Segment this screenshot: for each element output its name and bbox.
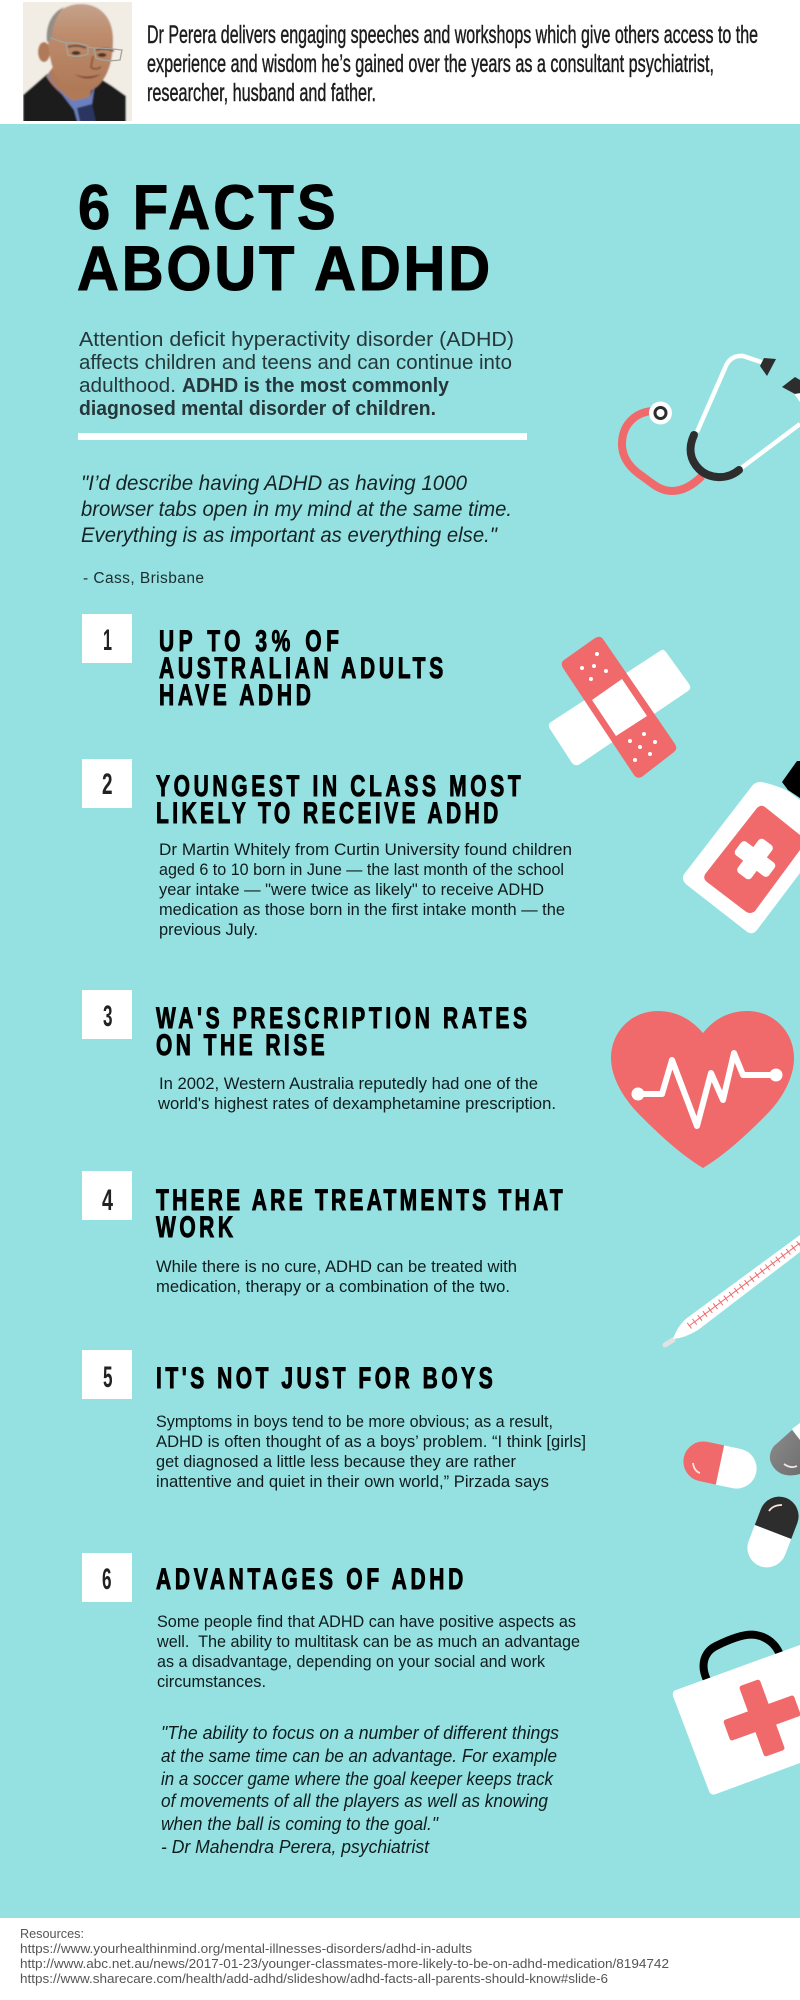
fact 2 heading [156,771,521,830]
fact 6 body: Some people find that ADHD can have positive aspects as [157,1613,576,1631]
fact 4 heading [156,1185,563,1244]
black and white pill [742,1491,800,1573]
icon: heart with pulse line [611,1011,794,1168]
fact 1 [82,614,443,712]
quote from Dr Mahendra Perera: in a soccer game where the goal keeper keeps track [161,1769,554,1789]
fact 2 body: aged 6 to 10 born in June — the last month of the school [159,861,564,879]
fact 5 [82,1350,586,1491]
fact 2 body: Dr Martin Whitely from Curtin University found children [159,841,572,859]
icon: thermometer [665,1235,800,1345]
intro paragraph [79,328,514,420]
intro paragraph: diagnosed mental disorder of children. [79,397,436,420]
number badge 1: 1 [103,624,112,657]
quote from Dr Mahendra Perera: at the same time can be an advantage. For example [161,1746,557,1766]
footer: resources: https://www.sharecare.com/health/add-adhd/slideshow/adhd-facts-all-parents-should-know#slide-6 [20,1971,608,1986]
quote from Cass [81,472,512,587]
quote from Dr Mahendra Perera: "The ability to focus on a number of different things [161,1723,559,1743]
fact 2 heading: YOUNGEST IN CLASS MOST [156,771,521,803]
number badge 5: 5 [103,1361,112,1394]
quote from Dr Mahendra Perera: when the ball is coming to the goal." [161,1814,440,1834]
quote from Cass: "I’d describe having ADHD as having 1000 [81,472,467,495]
fact 3 body: In 2002, Western Australia reputedly had one of the [159,1075,538,1093]
number badge 6: 6 [102,1563,112,1596]
title: ABOUT ADHD [77,233,490,304]
fact 5 body: inattentive and quiet in their own world,” Pirzada says [156,1473,549,1491]
header: presenter bio [20,0,758,124]
fact 6 body: circumstances. [157,1673,266,1691]
intro paragraph: ADHD is the most commonly [182,374,450,397]
fact 3 heading: WA'S PRESCRIPTION RATES [156,1003,527,1035]
quote from Dr Mahendra Perera: of movements of all the players as well as knowing [161,1791,548,1811]
fact 4 body: medication, therapy or a combination of the two. [156,1278,510,1296]
fact 6 body: as a disadvantage, depending on your social and work [157,1653,546,1671]
title: 6 FACTS [78,172,336,243]
bio text: researcher, husband and father. [147,79,376,107]
footer: resources [20,1926,669,1986]
title [77,172,490,304]
fact 6 heading: ADVANTAGES OF ADHD [156,1564,463,1596]
fact 5 body: ADHD is often thought of as a boys’ problem. “I think [girls] [156,1433,586,1451]
intro paragraph: Attention deficit hyperactivity disorder (ADHD) [79,328,514,351]
icon: first aid kit [673,1635,800,1795]
portrait photo of Dr Perera [20,0,135,124]
fact 2 body [159,841,572,939]
fact 3 heading [156,1003,527,1062]
quote from Dr Mahendra Perera [161,1723,559,1857]
fact 1 heading: HAVE ADHD [159,680,311,712]
fact 1 heading: UP TO 3% OF [159,626,339,658]
number badge 5 [82,1350,132,1399]
grey pill [770,1423,800,1476]
footer: resources: https://www.yourhealthinmind.org/mental-illnesses-disorders/adhd-in-adults [20,1941,473,1956]
number badge 3 [82,990,132,1039]
fact 1 heading: AUSTRALIAN ADULTS [159,653,443,685]
fact 2 [82,759,572,939]
fact 5 heading: IT'S NOT JUST FOR BOYS [156,1363,493,1395]
number badge 4: 4 [102,1184,113,1217]
quote from Cass: browser tabs open in my mind at the same time. [81,498,512,521]
fact 3 heading: ON THE RISE [156,1030,325,1062]
footer: resources: http://www.abc.net.au/news/2017-01-23/younger-classmates-more-likely-to-be-on-adhd-medication/8194742 [20,1956,669,1971]
fact 2 body: year intake — "were twice as likely" to receive ADHD [159,881,544,899]
fact 2 body: previous July. [159,921,258,939]
fact 3 [82,990,556,1113]
fact 4 [82,1171,563,1296]
number badge 2 [82,759,132,808]
fact 4 heading: WORK [156,1212,233,1244]
number badge 3: 3 [103,1000,112,1033]
fact 2 body: medication as those born in the first intake month — the [159,901,565,919]
icon: pills [680,1423,800,1573]
intro paragraph: affects children and teens and can continue into [79,351,512,374]
fact 4 body: While there is no cure, ADHD can be treated with [156,1258,517,1276]
coral pill [680,1438,760,1492]
quote from Dr Mahendra Perera: - Dr Mahendra Perera, psychiatrist [161,1837,430,1857]
fact 1 heading [159,626,443,712]
number badge 2: 2 [102,768,112,801]
fact 5 body [156,1413,586,1491]
fact 6 [82,1553,580,1857]
icon: medicine bottle [683,761,800,933]
fact 4 heading: THERE ARE TREATMENTS THAT [156,1185,563,1217]
fact 5 body: Symptoms in boys tend to be more obvious; as a result, [156,1413,553,1431]
footer: resources: Resources: [20,1926,84,1941]
fact 2 heading: LIKELY TO RECEIVE ADHD [156,798,498,830]
number badge 1 [82,614,132,663]
fact 5 body: get diagnosed a little less because they are rather [156,1453,516,1471]
icon: bandage [549,637,690,778]
intro paragraph: adulthood. [79,374,176,397]
fact 4 body [156,1258,517,1296]
quote from Cass: Everything is as important as everything else." [81,524,498,547]
number badge 6 [82,1553,132,1602]
fact 6 body [156,1613,580,1691]
quote from Cass: - Cass, Brisbane [83,570,204,587]
fact 3 body [157,1075,556,1113]
fact 3 body: world's highest rates of dexamphetamine prescription. [157,1095,556,1113]
icon: stethoscope [622,356,800,491]
bio text [147,21,758,107]
number badge 4 [82,1171,132,1220]
fact 6 body: well. The ability to multitask can be as much an advantage [156,1633,580,1651]
